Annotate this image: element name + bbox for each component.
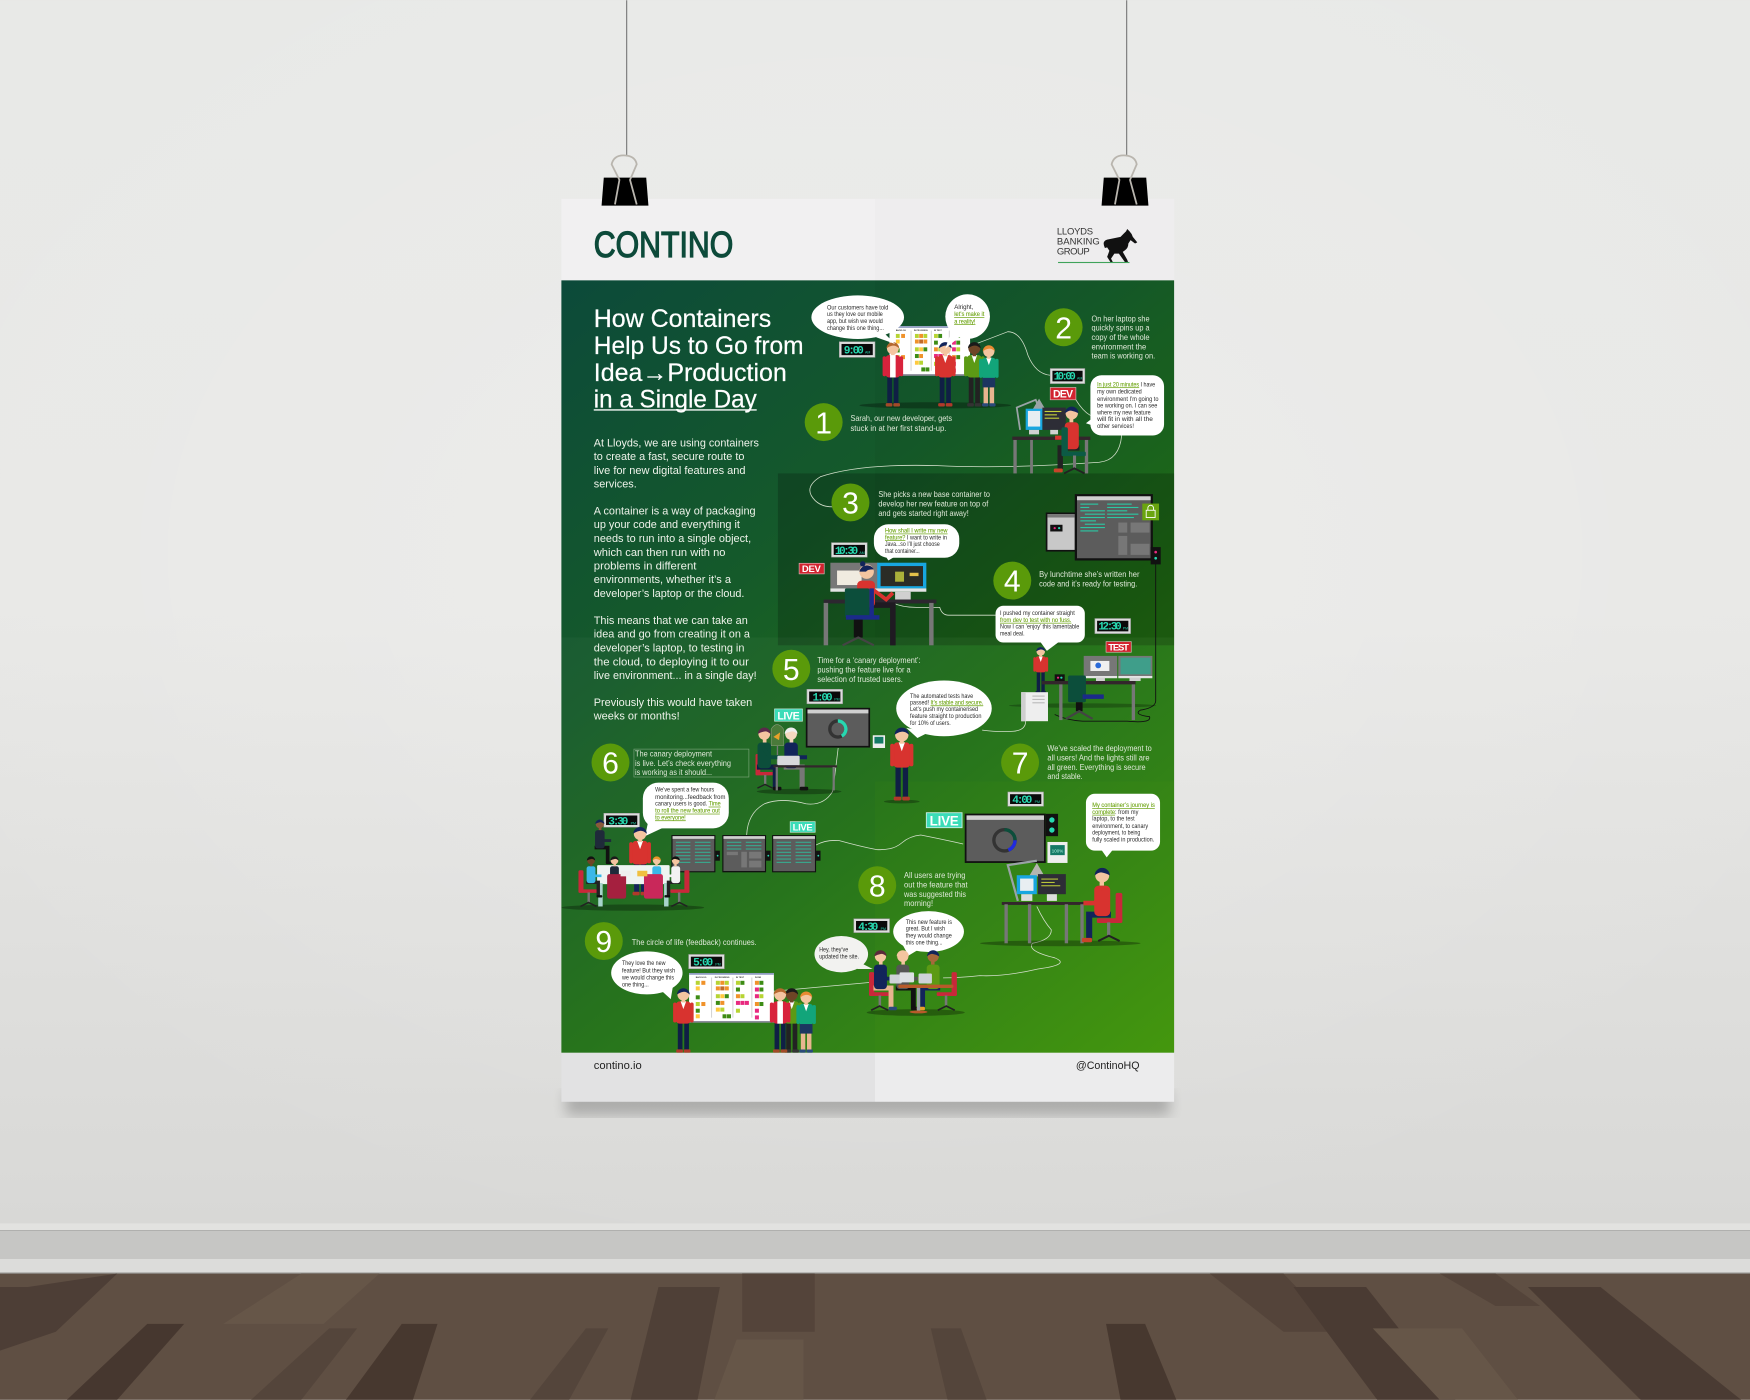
speech bubble: 20 minutes: In just 20 minutes I have	[1097, 381, 1156, 388]
step 3 caption: and gets started right away!	[878, 509, 969, 518]
speech bubble: 20 minutes: will fit in with all the	[1096, 416, 1154, 423]
title	[594, 306, 804, 414]
clock 5:00: 5:00	[693, 958, 713, 970]
title: Idea→Production	[594, 360, 787, 387]
speech bubble: they love the new feature: feature! But they wish	[622, 967, 676, 974]
logo: Lloyds Banking Group: BANKING	[1057, 237, 1100, 248]
step 1	[805, 294, 1011, 441]
step 5 caption: selection of trusted users.	[817, 675, 903, 684]
footer right fold panel	[875, 1053, 1174, 1102]
desk with lamp, monitors and developer	[980, 861, 1141, 946]
number badge 7: 7	[1012, 748, 1028, 781]
step 7 caption: all green. Everything is secure	[1047, 763, 1146, 772]
number badge 6: 6	[602, 748, 619, 781]
speech bubble: monitoring	[643, 783, 729, 836]
speech bubble: they love the new feature: They love the new	[622, 960, 666, 967]
step 4	[993, 562, 1156, 721]
step 2 caption	[1092, 315, 1155, 360]
speech bubble: automated tests: feature straight to production	[910, 713, 982, 720]
speech bubble: automated tests	[896, 680, 992, 738]
step 6	[561, 744, 821, 911]
speech bubble: alright	[945, 294, 990, 348]
step 8 caption: morning!	[904, 899, 933, 908]
step 8 caption: was suggested this	[903, 890, 966, 899]
intro text: A container is a way of packaging	[594, 506, 756, 518]
logo: Lloyds Banking Group: LLOYDS	[1057, 227, 1094, 238]
step 2 caption: quickly spins up a	[1092, 324, 1150, 333]
speech bubble: monitoring: to roll the new feature out	[655, 808, 720, 815]
speech bubble: customers: app, but wish we would	[827, 318, 883, 325]
speech bubble: automated tests: for 10% of users.	[910, 720, 951, 727]
intro text: live for new digital features and	[594, 465, 746, 477]
speech bubble: journey complete: My container’s journey is	[1092, 802, 1155, 809]
number badge 7	[1001, 744, 1039, 781]
speech bubble: 20 minutes: my own dedicated	[1097, 389, 1142, 396]
speech bubble: new feature: they would change	[906, 932, 952, 939]
number badge 4: 4	[1004, 566, 1021, 599]
person: Sarah presenting	[673, 988, 694, 1053]
intro text: the cloud, to deploying it to our	[594, 656, 749, 668]
step 7	[926, 744, 1160, 946]
kanban board: DONE	[755, 977, 762, 979]
kanban board: BACKLOG	[696, 976, 707, 979]
clock 1:00: 1:00	[812, 692, 833, 704]
status lights	[1046, 814, 1058, 836]
step 7 caption	[1047, 744, 1152, 781]
intro text: to create a fast, secure route to	[594, 451, 744, 463]
number badge 1	[805, 403, 843, 441]
step 5 caption	[817, 656, 921, 684]
clock 4:00	[1008, 792, 1044, 807]
intro text: needs to run into a single object,	[594, 533, 751, 545]
browser windows with container code	[1046, 494, 1153, 560]
speech bubble: journey complete	[1086, 794, 1160, 857]
speech bubble: journey complete: fully scaled in production.	[1092, 837, 1155, 844]
step 4 caption	[1039, 570, 1140, 589]
number badge 9	[585, 922, 623, 960]
step 3 caption	[878, 490, 991, 518]
step 6 caption: The canary deployment	[635, 749, 713, 758]
speech bubble: they love the new feature	[611, 951, 683, 999]
speech bubble: pushed container: meal deal.	[1000, 630, 1025, 637]
DEV tag	[799, 563, 824, 575]
intro text: live environment... in a single day!	[594, 670, 757, 682]
number badge 5: 5	[783, 654, 800, 687]
step 4 caption: code and it’s ready for testing.	[1039, 580, 1137, 589]
clock 5:00: PM	[715, 963, 721, 967]
kanban board: DONE	[952, 330, 958, 332]
speech bubble: they love the new feature: we would change this	[621, 975, 674, 982]
person: Sarah	[935, 342, 956, 406]
kanban board: IN TEST	[934, 330, 942, 332]
speech bubble: how shall I write: Java...so I’ll just choose	[885, 541, 940, 548]
server box	[1021, 692, 1048, 721]
kanban board	[689, 973, 774, 1023]
step 1 caption: Sarah, our new developer, gets	[850, 414, 952, 423]
step 8 caption: All users are trying	[904, 871, 965, 880]
speech bubble: updated the site: Hey, they’ve	[819, 947, 849, 954]
clock 3:30	[604, 813, 640, 828]
clock 12:30	[1095, 619, 1131, 634]
title: Help Us to Go from	[594, 333, 804, 360]
intro text: services.	[594, 478, 637, 490]
step 2 caption: team is working on.	[1092, 351, 1155, 360]
speech bubble: automated tests: The automated tests have	[910, 693, 974, 700]
speech bubble: customers: Our customers have told	[827, 304, 889, 311]
speech bubble: journey complete: complete: from my	[1092, 809, 1139, 816]
person: green sweater	[964, 342, 985, 406]
100% gadget	[1047, 842, 1068, 863]
speech bubble: new feature: this one thing...	[906, 939, 943, 946]
icon: bird cage	[771, 725, 783, 765]
speech bubble: automated tests: Let’s push my containerised	[910, 706, 979, 713]
binder clip left	[602, 0, 648, 206]
speech bubble: they love the new feature: one thing...	[622, 981, 649, 988]
poster	[561, 199, 1174, 1102]
person: teal top	[979, 345, 999, 406]
clock 10:30	[831, 543, 867, 558]
number badge 1: 1	[815, 407, 832, 440]
step 1 caption	[850, 414, 952, 433]
connector lines	[747, 332, 1122, 991]
wooden floor	[0, 1274, 1750, 1400]
header right fold panel	[875, 199, 1174, 280]
clock 4:00: 4:00	[1012, 795, 1033, 807]
speech bubble: pushed container: Now I can ’enjoy’ this lamentable	[1000, 624, 1080, 631]
number badge 3	[831, 483, 869, 521]
step 9 caption: The circle of life (feedback) continues.	[632, 938, 757, 947]
clock 3:30: 3:30	[608, 816, 629, 828]
intro text: weeks or months!	[593, 711, 680, 723]
small status gadget	[873, 735, 885, 748]
logo: Lloyds Banking Group: GROUP	[1057, 247, 1090, 258]
number badge 8: 8	[869, 870, 886, 903]
speech bubble: alright: Alright,	[954, 304, 974, 311]
number badge 2: 2	[1055, 312, 1072, 345]
number badge 8	[858, 866, 896, 904]
step 5 caption: Time for a ‘canary deployment’:	[817, 656, 921, 665]
step 6 caption	[634, 749, 749, 777]
number badge 2	[1045, 308, 1083, 346]
speech bubble: monitoring: to everyone!	[655, 814, 686, 821]
clock 4:00: PM	[1035, 800, 1040, 804]
logo: Contino: CONTINO	[594, 225, 733, 265]
kanban board: BACKLOG	[896, 329, 906, 332]
clock 5:00	[689, 954, 724, 970]
number badge 4	[993, 562, 1031, 600]
step 7 caption: We’ve scaled the deployment to	[1047, 744, 1152, 753]
step 1 caption: stuck in at her first stand-up.	[850, 424, 946, 433]
person: green sweater	[781, 988, 802, 1053]
intro text: idea and go from creating it on a	[594, 628, 751, 640]
clock 9:00	[839, 342, 875, 357]
speech bubble: 20 minutes	[1086, 375, 1164, 435]
speech bubble: monitoring: canary users is good. Time	[655, 801, 721, 808]
step 2	[1012, 308, 1164, 473]
step 3 caption: develop her new feature on top of	[878, 499, 989, 508]
clock 9:00: 9:00	[844, 345, 864, 357]
kanban board	[890, 326, 970, 376]
intro text: problems in different	[594, 560, 697, 572]
canary table with two people	[756, 728, 842, 794]
clock 10:00	[1050, 369, 1085, 384]
title: in a Single Day	[594, 387, 757, 414]
LIVE tag: LIVE	[777, 710, 800, 722]
speech bubble: alright: let’s make it	[954, 311, 985, 318]
speech bubble: 20 minutes: other services!	[1097, 423, 1134, 430]
kanban board: IN TEST	[736, 977, 745, 979]
kanban board: IN PROGRESS	[914, 330, 928, 332]
intro text: which can then run with no	[593, 547, 725, 559]
speech bubble: new feature	[893, 911, 964, 956]
step 5	[756, 650, 992, 803]
ground shadow	[859, 402, 1011, 408]
desk with monitors and developer	[1012, 399, 1090, 473]
number badge 5	[772, 650, 810, 688]
speech bubble: journey complete: environment, to canary	[1092, 823, 1149, 830]
speech bubble: journey complete: deployment, to being	[1092, 829, 1141, 836]
step 9	[585, 922, 816, 1053]
DEV tag: DEV	[802, 564, 822, 575]
speech bubble: 20 minutes: where my new feature	[1096, 409, 1151, 416]
intro text: developer’s laptop or the cloud.	[594, 588, 744, 600]
clock 12:30: PM	[1123, 627, 1128, 631]
speech bubble: monitoring: monitoring...feedback from	[655, 794, 725, 801]
speech bubble: how shall I write: that container...	[885, 548, 920, 555]
step 6 caption: is live. Let’s check everything	[635, 759, 731, 768]
clock 1:00	[807, 689, 843, 704]
cable to test server	[1055, 564, 1156, 722]
right fold highlight	[875, 781, 1174, 1053]
person: Sarah's colleague in red jacket	[883, 342, 903, 406]
canary browser window with progress ring	[806, 708, 870, 748]
speech bubble: new feature: This new feature is	[906, 919, 952, 926]
desk with two monitors and developer	[824, 561, 936, 645]
step 7 caption: all users! And the lights still are	[1047, 753, 1150, 762]
person: standing woman	[884, 728, 920, 803]
step 8 caption: out the feature that	[904, 880, 968, 889]
speech bubble: how shall I write: How shall I write my new	[885, 528, 948, 535]
lower fold highlight	[561, 638, 1174, 1053]
speech bubble: customers	[811, 295, 904, 344]
clock 10:30: 10:30	[835, 546, 859, 558]
step 5 caption: pushing the feature live for a	[817, 666, 911, 675]
footer band	[561, 1053, 875, 1102]
speech bubble: new feature: great. But I wish	[906, 926, 946, 933]
step 8	[815, 866, 968, 1016]
person: red jacket	[770, 988, 790, 1053]
step 2 caption: On her laptop she	[1092, 315, 1150, 324]
three production browser windows	[671, 835, 821, 872]
intro text: developer’s laptop, to testing in	[594, 642, 744, 654]
intro text: environments, whether it’s a	[594, 574, 732, 586]
speech bubble: automated tests: passed! It’s stable and secure.	[910, 699, 984, 706]
number badge 9: 9	[595, 926, 612, 959]
speech bubble: pushed container: from dev to test with no fuss.	[1000, 617, 1072, 624]
title: How Containers	[594, 306, 771, 333]
TEST tag: TEST	[1108, 643, 1129, 654]
person: teal top	[796, 992, 816, 1053]
footer handle: @ContinoHQ	[1076, 1060, 1140, 1072]
step 2 caption: environment the	[1092, 343, 1146, 352]
step 2 caption: copy of the whole	[1092, 333, 1150, 342]
intro text: At Lloyds, we are using containers	[594, 438, 759, 450]
speech bubble: journey complete: laptop, to the test	[1092, 816, 1135, 823]
clock 10:30: AM	[859, 551, 865, 555]
speech bubble: monitoring: We’ve spent a few hours	[655, 787, 714, 794]
speech bubble: 20 minutes: be working on. I can see	[1097, 403, 1158, 410]
intro text: This means that we can take an	[594, 615, 748, 627]
speech bubble: customers: change this one thing...	[827, 325, 884, 332]
speech bubble: customers: us they love our mobile	[827, 311, 883, 318]
clock 10:00: AM	[1077, 377, 1082, 381]
round table with three people	[867, 950, 965, 1016]
number badge 6	[592, 744, 629, 781]
skirting board	[0, 1223, 1750, 1274]
binder clip right	[1102, 0, 1148, 206]
speech bubble: updated the site: updated the site.	[819, 954, 859, 961]
step 6 caption: is working as it should...	[635, 768, 712, 777]
dark panel behind steps 3 and 4	[778, 473, 1174, 645]
speech bubble: updated the site	[815, 936, 873, 972]
LIVE tag large: LIVE	[930, 813, 959, 828]
clock 9:00: AM	[865, 350, 870, 354]
test desk with person eating	[1009, 647, 1156, 720]
meeting table with team	[561, 819, 704, 911]
header band	[561, 199, 1174, 280]
step 8 caption	[903, 871, 968, 908]
clock 1:00: PM	[834, 697, 840, 701]
speech bubble: pushed container	[996, 606, 1085, 651]
LIVE tag small: LIVE	[793, 823, 813, 834]
logo: Lloyds Banking Group	[1057, 227, 1137, 263]
100% gadget: 100%	[1052, 848, 1063, 853]
clock 4:30: 4:30	[858, 922, 879, 934]
scaled browser window with ring	[965, 814, 1046, 863]
intro text: up your code and everything it	[594, 519, 741, 531]
intro text	[593, 438, 759, 723]
clock 10:00: 10:00	[1054, 372, 1076, 384]
poster shadow	[566, 1091, 1170, 1115]
speech bubble: how shall I write	[874, 524, 959, 560]
step 3	[799, 483, 1161, 645]
DEV tag: DEV	[1053, 389, 1073, 401]
speech bubble: 20 minutes: environment I’m going to	[1097, 396, 1159, 403]
footer link: contino.io	[594, 1060, 642, 1072]
clock 4:30: PM	[881, 927, 886, 931]
icon: lock	[1142, 504, 1159, 520]
speech bubble: alright: a reality!	[954, 318, 976, 325]
clock 4:30	[854, 919, 890, 934]
number badge 3: 3	[842, 488, 859, 521]
green background	[561, 280, 1174, 1053]
clock 3:30: PM	[631, 821, 636, 825]
step 7 caption: and stable.	[1047, 772, 1083, 781]
speech bubble: pushed container: I pushed my container straight	[1000, 610, 1075, 617]
step 4 caption: By lunchtime she’s written her	[1039, 570, 1140, 579]
clock 12:30: 12:30	[1098, 622, 1122, 634]
intro text: Previously this would have taken	[594, 697, 752, 709]
kanban board: IN PROGRESS	[715, 977, 730, 979]
right fold shade	[875, 280, 1174, 638]
status lights	[1151, 547, 1161, 564]
speech bubble: how shall I write: feature? I want to write in	[885, 534, 948, 541]
step 3 caption: She picks a new base container to	[878, 490, 991, 499]
